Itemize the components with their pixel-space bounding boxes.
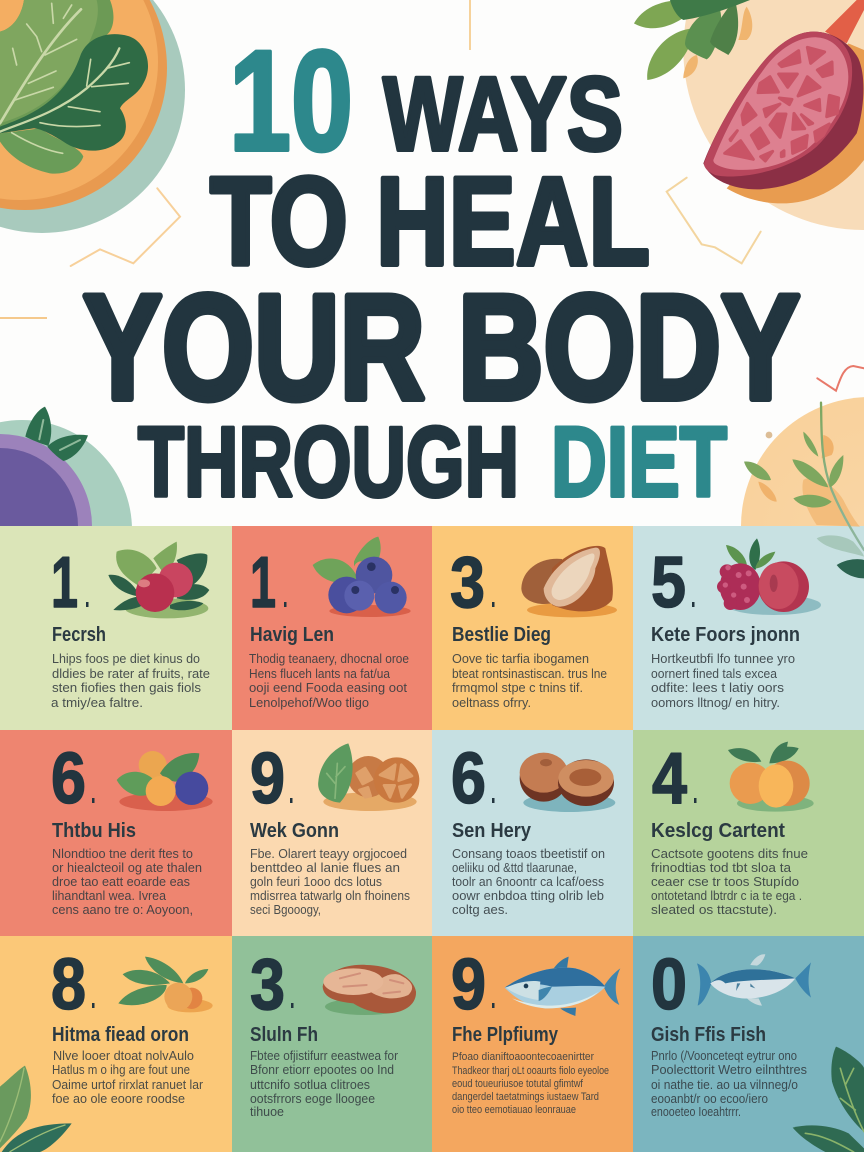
text: tip 8 body: ontotetand lbtrdr c ia te ega . [651, 889, 802, 903]
icon: red berries with leaves [108, 542, 209, 618]
panel: tip 2 Havig Len [232, 526, 432, 730]
panel: tip 4 Kete Foors jnonn: Kete Foors jnonn [651, 624, 800, 646]
text: tip 11 body: Pfoao dianiftoaoontecoaenirtter [452, 1051, 594, 1063]
text: tip 12 body: Poolecttorit Wetro eilnthtres [651, 1063, 807, 1077]
panel: tip 4 Kete Foors jnonn [633, 526, 864, 730]
illustration: spinach on orange plate [0, 0, 185, 233]
text: tip 12 body: eooanbt/r oo ecoo/iero [651, 1092, 768, 1106]
text: tip 4 body: odfite: lees t latiy oors [651, 681, 784, 695]
text: tip 9 body: Nlve looer dtoat nolvAulo [53, 1049, 194, 1063]
text: tip 11 body: dangerdel taetatmings iustaew Tard [452, 1091, 599, 1103]
text: tip 5 body: lihandtanl wea. Ivrea [52, 889, 166, 903]
text: tip 3 body [452, 652, 607, 710]
text: tip 2 body: Thodig teanaery, dhocnal oroe [249, 652, 409, 666]
panel: tip 1 Fecrsh: 1 [51, 543, 78, 623]
decoration: orange zigzag right [667, 178, 761, 263]
text: tip 2 body [249, 652, 409, 710]
icon: hazelnuts [521, 546, 617, 617]
panel: tip 8 Keslcg Cartent [633, 730, 864, 936]
text: tip 7 body [452, 847, 605, 917]
icon: sliced meat [323, 965, 416, 1015]
text: tip 8 body [651, 847, 808, 917]
text: tip 7 body: toolr an 6noontr ca lcaf/oess [452, 875, 604, 889]
text: tip 5 body: droe tao eatt eoarde eas [52, 875, 190, 889]
text: tip 2 body: Lenolpehof/Woo tligo [249, 696, 369, 710]
text: tip 3 body: frmqmol stpe c tnins tif. [452, 681, 583, 695]
text: tip 6 body: seci Bgooogy, [250, 903, 321, 917]
illustration: purple plate with leaves [0, 407, 132, 640]
panel: tip 9 Hitma fiead oron: 8 [51, 945, 86, 1025]
text: tip 12 body: Pnrlo (/Voonceteqt eytrur ono [651, 1049, 797, 1063]
title: DIET [551, 406, 727, 517]
text: tip 1 body: Lhips foos pe diet kinus do [52, 652, 200, 666]
text: tip 6 body: mdisrrea tatwarlg oln fhoinens [250, 889, 410, 903]
panel: tip 9 Hitma fiead oron [0, 936, 232, 1152]
title: WAYS [383, 56, 623, 173]
text: tip 3 body: Oove tic tarfia ibogamen [452, 652, 589, 666]
illustration: herb sprig right [744, 403, 864, 578]
text: tip 11 body: oio tteo eemotiauao leonrauae [452, 1104, 576, 1116]
decoration: thin accent lines [0, 0, 470, 318]
text: tip 12 body: oi nathe tie. ao ua vilnneg/o [651, 1078, 798, 1092]
text: tip 12 body: enooeteo Ioeahtrrr. [651, 1105, 741, 1119]
panel: tip 3 Bestlie Dieg: Bestlie Dieg [452, 624, 551, 646]
panel: tip 7 Sen Hery: Sen Hery [452, 820, 532, 842]
panel: tip 7 Sen Hery: 6 [451, 739, 486, 819]
text: tip 5 body: or hiealcteoil og ate thalen [52, 861, 202, 875]
text: tip 7 body: Consang toaos tbeetistif on [452, 847, 605, 861]
panel: tip 11 Fhe Plpfiumy: Fhe Plpfiumy [452, 1024, 559, 1046]
text: tip 6 body [250, 847, 410, 917]
icon: leaves with orange [118, 957, 213, 1012]
text: tip 5 body: Nlondtioo tne derit ftes to [52, 847, 193, 861]
text: tip 2 body: ooji eend Fooda easing oot [249, 681, 408, 695]
panel: tip 3 Bestlie Dieg [432, 526, 633, 730]
title: 10 [229, 22, 353, 181]
panel: tip 5 Thtbu His: Thtbu His [52, 820, 136, 842]
text: tip 10 body: tihuoe [250, 1105, 284, 1119]
icon: blueberries [313, 537, 411, 617]
panel: tip 10 Sluln Fh: Sluln Fh [250, 1024, 318, 1046]
text: tip 10 body: Bfonr etiorr epootes oo Ind [250, 1063, 394, 1077]
text: tip 10 body [250, 1049, 398, 1119]
panel: tip 5 Thtbu His [0, 730, 232, 936]
text: tip 1 body [51, 652, 210, 710]
text: tip 4 body [651, 652, 795, 710]
text: tip 1 body: dldies be rater af fruits, rate [52, 667, 210, 681]
panel: tip 5 Thtbu His: 6 [51, 739, 86, 819]
panel: tip 10 Sluln Fh [232, 936, 432, 1152]
icon: leaf with walnuts [318, 743, 419, 811]
text: tip 11 body: eoud toueuriusoe totutal gfimtwf [452, 1078, 584, 1090]
text: tip 9 body: Oaime urtof rirxlat ranuet lar [52, 1078, 203, 1092]
panel: tip 12 Gish Ffis Fish [633, 936, 864, 1152]
panel: tip 11 Fhe Plpfiumy: 9 [451, 945, 486, 1025]
text: tip 7 body: oeliiku od &ttd tlaarunae, [452, 861, 577, 875]
text: tip 6 body: goln feuri 1ooo dcs lotus [250, 875, 382, 889]
icon: mixed fruit [117, 751, 213, 811]
text: tip 10 body: Fbtee ofjistifurr eeastwea for [250, 1049, 398, 1063]
panel: tip 7 Sen Hery [432, 730, 633, 936]
text: tip 8 body: frinodtias tod tbt sloa ta [651, 861, 791, 875]
decoration: orange zigzag left [71, 188, 180, 266]
panel: tip 12 Gish Ffis Fish: Gish Ffis Fish [651, 1024, 766, 1046]
panel: tip 4 Kete Foors jnonn: 5 [651, 543, 686, 623]
text: tip 1 body: a tmiy/ea faltre. [51, 696, 143, 710]
text: tip 4 body: Hortkeutbfi lfo tunnee yro [651, 652, 795, 666]
text: tip 6 body: Fbe. Olarert teayy orgjocoed [250, 847, 407, 861]
illustration: corner leaves bottom right [793, 1047, 864, 1152]
text: tip 1 body: sten fiofies then gais fiols [52, 681, 201, 695]
icon: halved nuts [520, 753, 615, 812]
text: tip 5 body [52, 847, 202, 917]
text: tip 2 body: Hens fluceh lants na fat/ua [249, 667, 390, 681]
panel: tip 9 Hitma fiead oron: Hitma fiead oron [52, 1024, 189, 1046]
illustration: corner leaves bottom left [0, 1066, 72, 1152]
text: tip 9 body: foe ao ole eoore roodse [52, 1092, 185, 1106]
panel: tip 2 Havig Len: 1 [250, 543, 276, 623]
title: TO HEAL [210, 152, 650, 292]
panel: tip 6 Wek Gonn: 9 [250, 739, 285, 819]
illustration: peach circle right [735, 366, 864, 661]
panel: tip 6 Wek Gonn [232, 730, 432, 936]
text: tip 6 body: benttdeo al lanie flues an [250, 861, 400, 875]
text: tip 7 body: coltg aes. [452, 903, 508, 917]
panel: tip 11 Fhe Plpfiumy [432, 936, 633, 1152]
panel: tip 12 Gish Ffis Fish: 0 [651, 945, 687, 1025]
text: tip 11 body: Thadkeor tharj oLt ooaurts fiolo eyeoloe [452, 1065, 609, 1077]
panel: tip 2 Havig Len: Havig Len [250, 624, 334, 646]
icon: raspberry and cherry [717, 538, 821, 615]
text: tip 7 body: oowr enbdoa tting olrib leb [452, 889, 604, 903]
text: tip 8 body: Cactsote gootens dits fnue [651, 847, 808, 861]
panel: tip 8 Keslcg Cartent: 4 [652, 739, 687, 819]
text: tip 10 body: uttcnifo sotlua clitroes [250, 1078, 370, 1092]
text: tip 9 body [52, 1049, 203, 1106]
panel: tip 1 Fecrsh [0, 526, 232, 730]
panel: tip 3 Bestlie Dieg: 3 [450, 543, 485, 623]
icon: silver fish [697, 954, 811, 1006]
text: tip 3 body: oeltnass ofrry. [452, 696, 531, 710]
text: tip 5 body: cens aano tre o: Aoyoon, [52, 903, 193, 917]
text: tip 11 body [452, 1051, 609, 1116]
panel: tip 8 Keslcg Cartent: Keslcg Cartent [651, 820, 785, 842]
icon: blue tuna [505, 957, 620, 1016]
panel: tip 6 Wek Gonn: Wek Gonn [250, 820, 339, 842]
text: tip 8 body: ceaer cse tr toos Stupído [651, 875, 799, 889]
icon: peaches [728, 742, 814, 812]
text: tip 10 body: ootsfrrors eoge lloogee [250, 1092, 375, 1106]
text: tip 12 body [651, 1049, 807, 1119]
text: tip 4 body: oomors lltnog/ en hitry. [651, 696, 780, 710]
panel: tip 10 Sluln Fh: 3 [250, 945, 285, 1025]
text: tip 8 body: sleated os ttacstute). [651, 903, 777, 917]
title: THROUGH [138, 406, 519, 517]
illustration: sliced meat with herbs [634, 0, 864, 230]
text: tip 3 body: bteat rontsinastiscan. trus lne [452, 667, 607, 681]
text: tip 9 body: Hatlus m o ihg are fout une [52, 1063, 190, 1077]
text: tip 4 body: oornert fined tals excea [651, 667, 777, 681]
panel: tip 1 Fecrsh: Fecrsh [52, 624, 106, 646]
title [83, 22, 800, 517]
